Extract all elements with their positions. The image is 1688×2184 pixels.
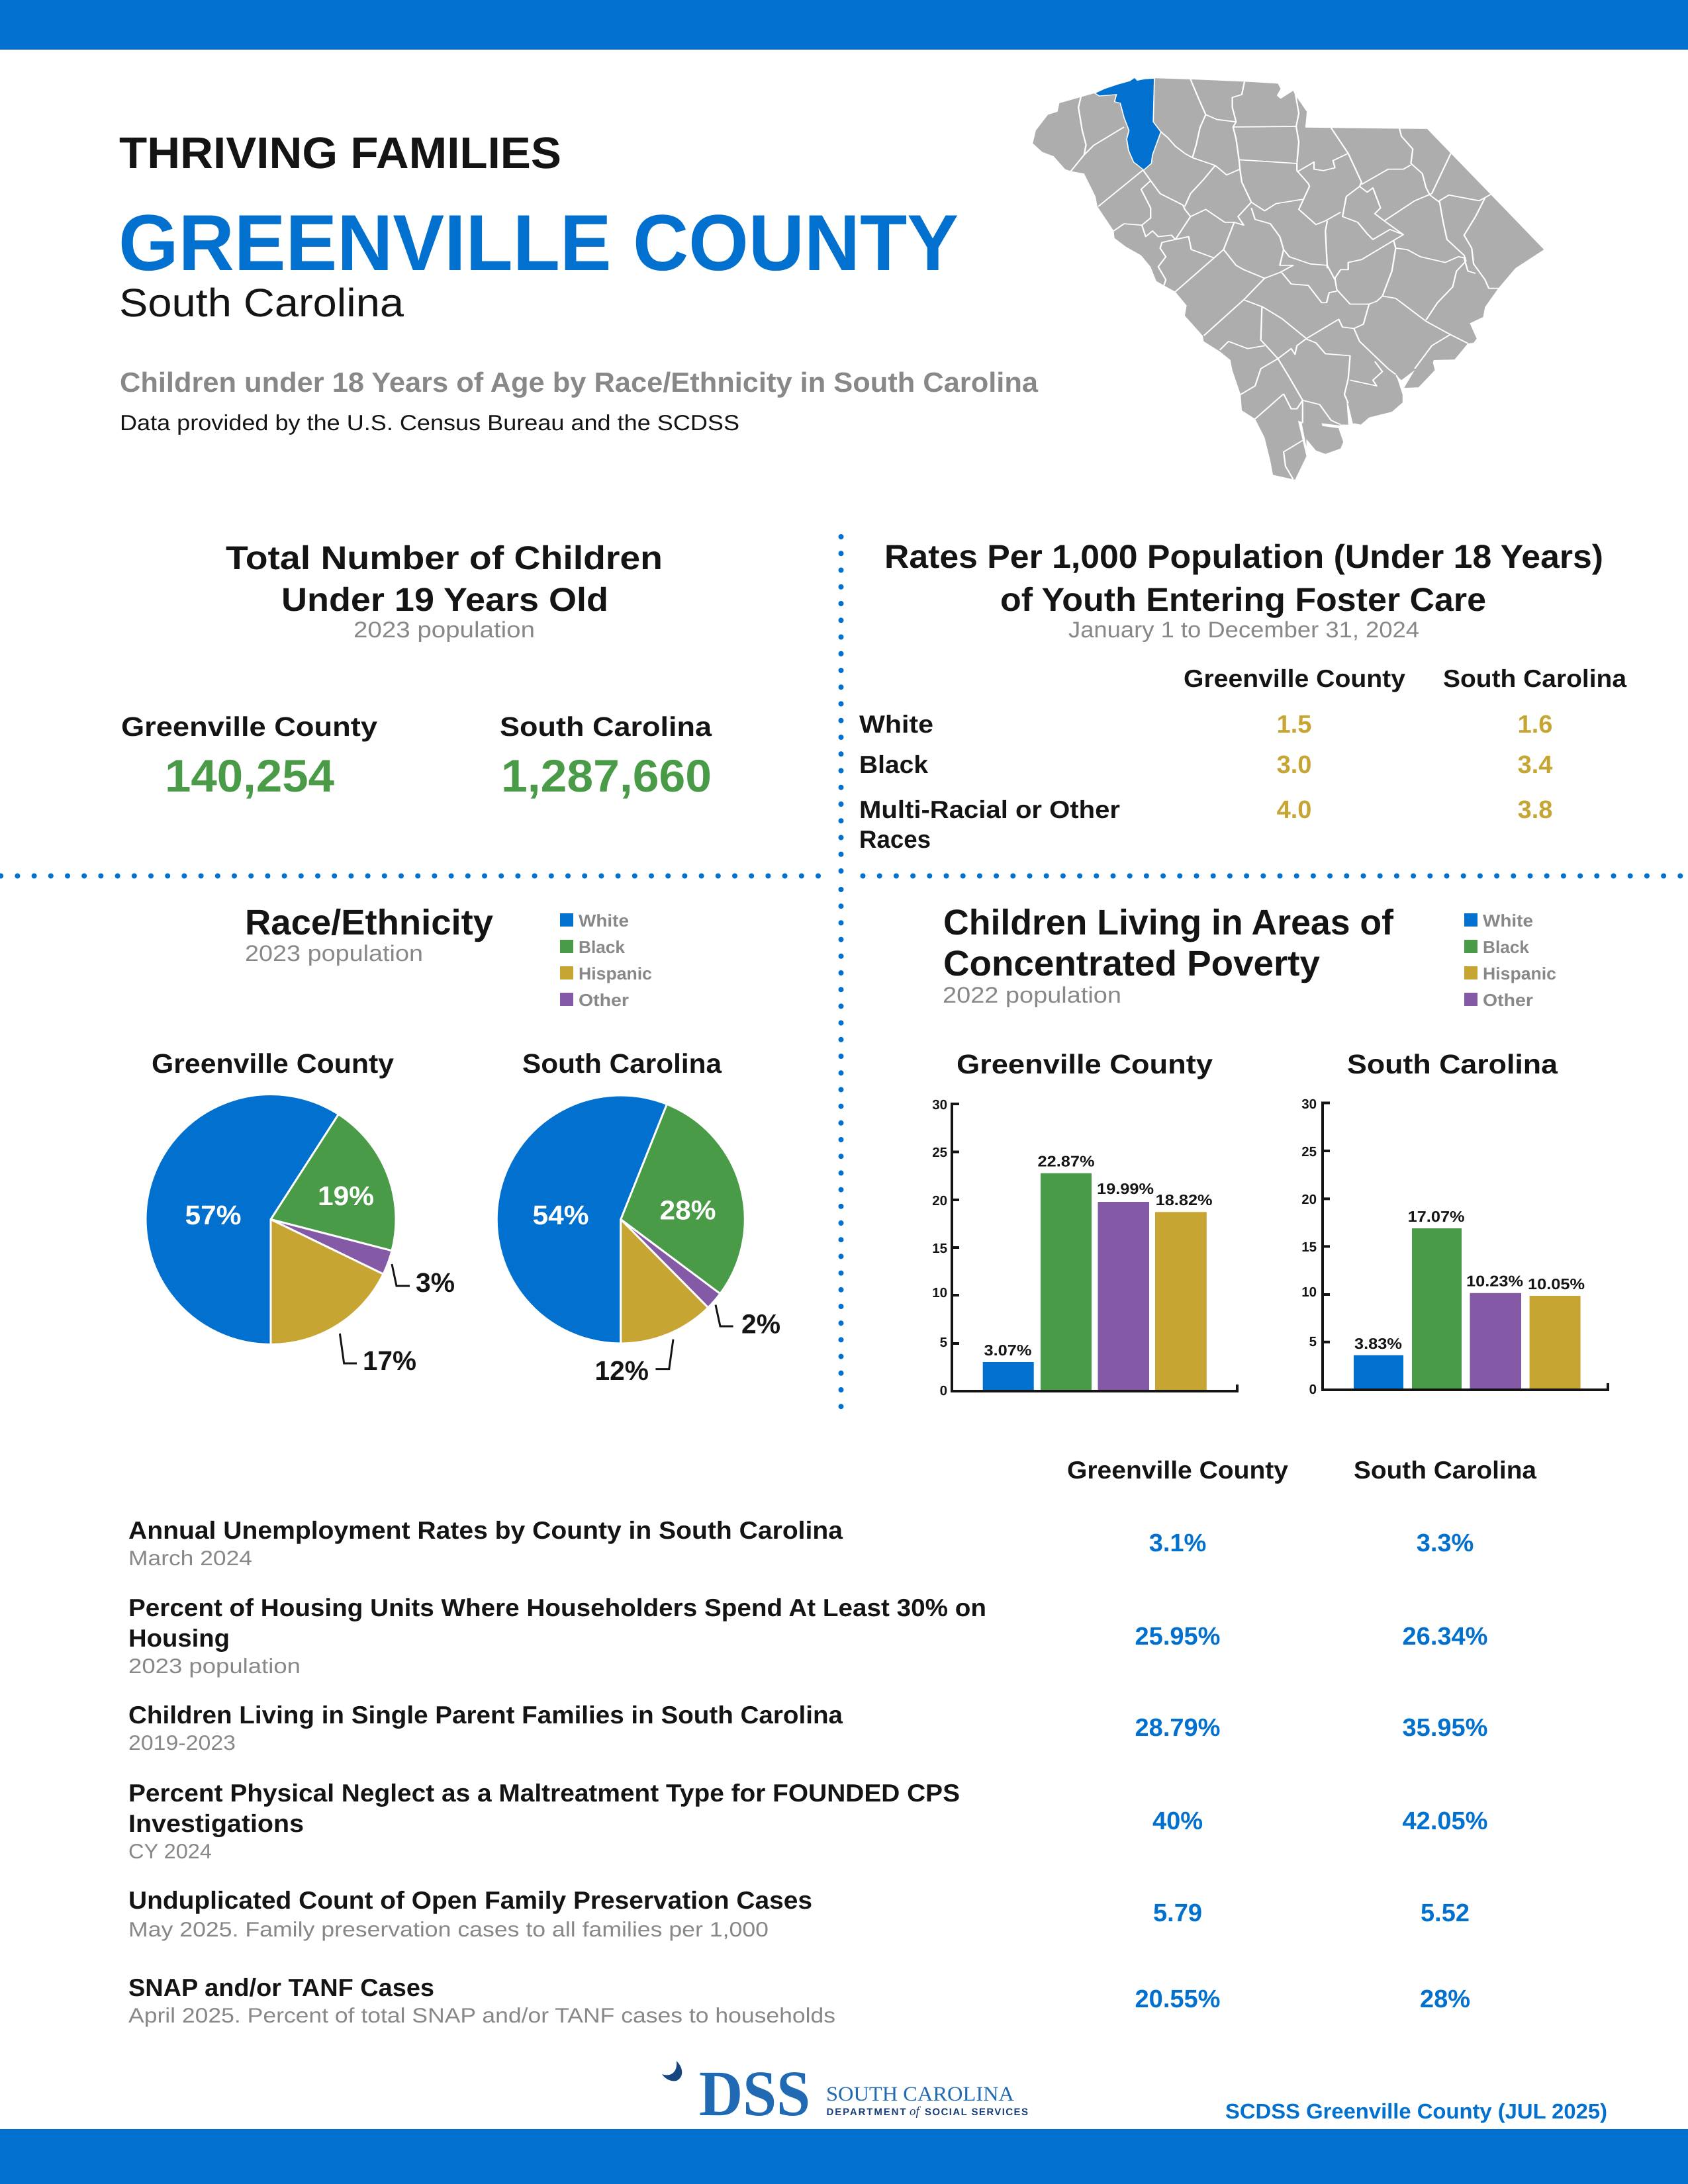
row: physical neglect: 40% (1152, 1807, 1203, 1835)
row: housing (128, 1594, 1487, 1678)
row: physical neglect: Percent Physical Neglect as a Maltreatment Type for FOUNDED CPS (128, 1779, 960, 1807)
column header: greenville: Greenville County (1067, 1456, 1288, 1484)
heading line two: Concentrated Poverty (943, 944, 1320, 983)
pie labels: greenville: 57% (185, 1200, 241, 1230)
subtitle: south carolina: South Carolina (119, 281, 404, 325)
subheading: 2023 population (245, 941, 423, 966)
subtitle: children under 18: Children under 18 Years of Age by Race/Ethnicity in South Carolina (120, 367, 1039, 398)
row: multi-racial: Multi-Racial or Other (859, 796, 1120, 823)
row: snap: 20.55% (1135, 1985, 1220, 2013)
row: snap: 28% (1420, 1985, 1470, 2013)
row: single parent: 35.95% (1403, 1714, 1487, 1742)
bottom banner (0, 2129, 1688, 2184)
row: physical neglect: Investigations (128, 1809, 304, 1837)
header text block (118, 128, 1039, 435)
logo department line: SOCIAL SERVICES (925, 2107, 1028, 2118)
row: housing: Percent of Housing Units Where Householders Spend At Least 30% on (128, 1594, 986, 1621)
title: thriving families: THRIVING FAMILIES (119, 128, 561, 178)
data source note: Data provided by the U.S. Census Bureau and the SCDSS (120, 410, 739, 435)
row: physical neglect: 42.05% (1403, 1807, 1487, 1835)
row: housing: 26.34% (1403, 1623, 1487, 1651)
legend: Hispanic (579, 964, 652, 983)
legend: Black (1483, 937, 1530, 957)
chart label: south carolina: South Carolina (522, 1048, 722, 1079)
row: single parent: Children Living in Single Parent Families in South Carolina (128, 1701, 843, 1729)
row: snap (128, 1974, 1470, 2027)
divider: horizontal dotted left (1, 874, 821, 879)
values: 1.6 (1518, 711, 1552, 739)
pie chart: south carolina (496, 1095, 745, 1343)
row: housing: 2023 population (128, 1654, 301, 1678)
values: 4.0 (1277, 796, 1311, 824)
bar chart: south carolina: 15 (1301, 1240, 1317, 1255)
bar chart: south carolina: 30 (1301, 1097, 1317, 1112)
greenville label: Greenville County (121, 711, 377, 742)
chart label: south carolina: South Carolina (1347, 1049, 1558, 1079)
row: black: Black (859, 751, 928, 778)
panel: concentrated poverty (932, 903, 1608, 1398)
bar chart: greenville: 25 (932, 1145, 947, 1160)
row: physical neglect (128, 1779, 1487, 1863)
pie labels: greenville (185, 1181, 455, 1376)
top banner (0, 0, 1688, 50)
legend (560, 911, 652, 1010)
row: family preservation: May 2025. Family preservation cases to all families per 1,000 (128, 1917, 769, 1941)
subheading: 2022 population (943, 983, 1121, 1008)
footer credit: SCDSS Greenville County (JUL 2025) (1225, 2099, 1607, 2123)
panel: race/ethnicity (146, 903, 780, 1386)
logo state name: SOUTH CAROLINA (826, 2082, 1015, 2105)
row: physical neglect: CY 2024 (128, 1839, 212, 1863)
pie labels: south carolina: 54% (532, 1200, 589, 1230)
row: white: White (859, 710, 933, 738)
subheading: 2023 population (353, 617, 535, 643)
heading: Total Number of Children (226, 539, 663, 576)
panel: foster care rates (859, 538, 1627, 853)
pie labels: south carolina: 12% (594, 1355, 649, 1386)
values: 1.5 (1277, 711, 1311, 739)
row: unemployment: 3.3% (1417, 1529, 1474, 1557)
bar chart: south carolina: 17.07% (1408, 1208, 1465, 1225)
divider: horizontal dotted right (863, 874, 1688, 879)
bar chart: south carolina: 25 (1301, 1144, 1317, 1160)
legend: White (579, 911, 629, 931)
divider: vertical dotted top (838, 537, 843, 874)
legend: White (1483, 911, 1533, 931)
row: family preservation: Unduplicated Count of Open Family Preservation Cases (128, 1886, 812, 1914)
values (1277, 711, 1552, 824)
pie labels: south carolina (532, 1195, 780, 1386)
column header: south carolina: South Carolina (1354, 1456, 1537, 1484)
greenville number: 140,254 (165, 751, 334, 801)
pie labels: south carolina: 2% (741, 1309, 780, 1340)
bar chart: south carolina: 0 (1309, 1382, 1317, 1397)
county: greenville (1095, 77, 1161, 170)
row: family preservation: 5.52 (1421, 1899, 1470, 1927)
bar chart: south carolina: 10.23% (1466, 1273, 1523, 1290)
logo: dss south carolina (662, 2058, 1028, 2130)
row: single parent: 2019-2023 (128, 1731, 236, 1754)
pie labels: greenville: 17% (363, 1345, 416, 1376)
row: unemployment: Annual Unemployment Rates by County in South Carolina (128, 1516, 843, 1544)
legend: Hispanic (1483, 964, 1556, 983)
row: housing: 25.95% (1135, 1623, 1220, 1651)
chart label: greenville: Greenville County (957, 1049, 1213, 1079)
pie chart: greenville (146, 1095, 396, 1345)
column header: greenville: Greenville County (1184, 664, 1405, 692)
icon: crescent (662, 2061, 682, 2081)
south carolina number: 1,287,660 (501, 751, 712, 801)
pie labels: greenville: 19% (318, 1181, 374, 1211)
bar chart: greenville: 15 (932, 1241, 947, 1256)
row: single parent (128, 1701, 1487, 1754)
legend (1464, 911, 1556, 1010)
bar chart: greenville: 19.99% (1097, 1180, 1154, 1197)
bar chart: greenville: 0 (940, 1383, 947, 1398)
row: unemployment (128, 1516, 1474, 1570)
bar chart: greenville: 30 (932, 1097, 947, 1113)
pie labels: greenville: 3% (416, 1267, 455, 1298)
logo wordmark: DSS (699, 2058, 810, 2130)
row: unemployment: 3.1% (1149, 1529, 1206, 1557)
bar chart: greenville: 5 (940, 1335, 947, 1350)
bar chart: south carolina: 10.05% (1528, 1275, 1585, 1293)
row: housing: Housing (128, 1624, 230, 1652)
bar chart: greenville (932, 1097, 1237, 1398)
logo department line (826, 2105, 1028, 2118)
pie labels: south carolina: 28% (659, 1195, 716, 1226)
subheading: January 1 to December 31, 2024 (1068, 617, 1419, 643)
bar chart: south carolina: 20 (1301, 1192, 1317, 1207)
panel: indicators table (128, 1456, 1537, 2027)
row: snap: SNAP and/or TANF Cases (128, 1974, 434, 2001)
map: south carolina counties with greenville highlighted (1033, 77, 1544, 480)
bar chart: south carolina: 10 (1301, 1285, 1317, 1300)
heading: Rates Per 1,000 Population (Under 18 Years) (884, 538, 1603, 575)
legend: Other (579, 990, 629, 1010)
legend: Other (1483, 990, 1533, 1010)
heading: Race/Ethnicity (245, 903, 493, 942)
logo department line: DEPARTMENT (826, 2107, 906, 2118)
row: snap: April 2025. Percent of total SNAP and/or TANF cases to households (128, 2003, 835, 2027)
row: races: Races (859, 825, 931, 853)
bar chart: south carolina (1301, 1097, 1608, 1397)
bar chart: greenville: 10 (932, 1285, 947, 1300)
bar chart: south carolina: 3.83% (1354, 1335, 1402, 1352)
panel: total number of children (121, 539, 712, 801)
divider: vertical dotted bottom (838, 889, 843, 1410)
heading: Children Living in Areas of (943, 903, 1394, 942)
bar chart: greenville: 18.82% (1156, 1191, 1213, 1208)
column header: south carolina: South Carolina (1443, 664, 1627, 692)
south carolina label: South Carolina (500, 711, 712, 742)
legend: Black (579, 937, 626, 957)
heading line two: of Youth Entering Foster Care (1000, 581, 1486, 618)
bar chart: south carolina: 5 (1309, 1334, 1317, 1349)
bar chart: greenville: 22.87% (1038, 1153, 1095, 1170)
values: 3.0 (1277, 751, 1311, 779)
title: greenville county: GREENVILLE COUNTY (118, 199, 959, 287)
row: unemployment: March 2024 (128, 1546, 252, 1570)
row: family preservation (128, 1886, 1470, 1941)
bar chart: greenville: 20 (932, 1193, 947, 1208)
row: family preservation: 5.79 (1153, 1899, 1202, 1927)
bar chart: greenville: 3.07% (984, 1342, 1031, 1359)
chart label: greenville: Greenville County (152, 1048, 394, 1079)
logo department line: of (910, 2105, 921, 2118)
heading line two: Under 19 Years Old (281, 581, 608, 618)
values: 3.4 (1518, 751, 1552, 779)
row: single parent: 28.79% (1135, 1714, 1220, 1742)
values: 3.8 (1518, 796, 1552, 824)
